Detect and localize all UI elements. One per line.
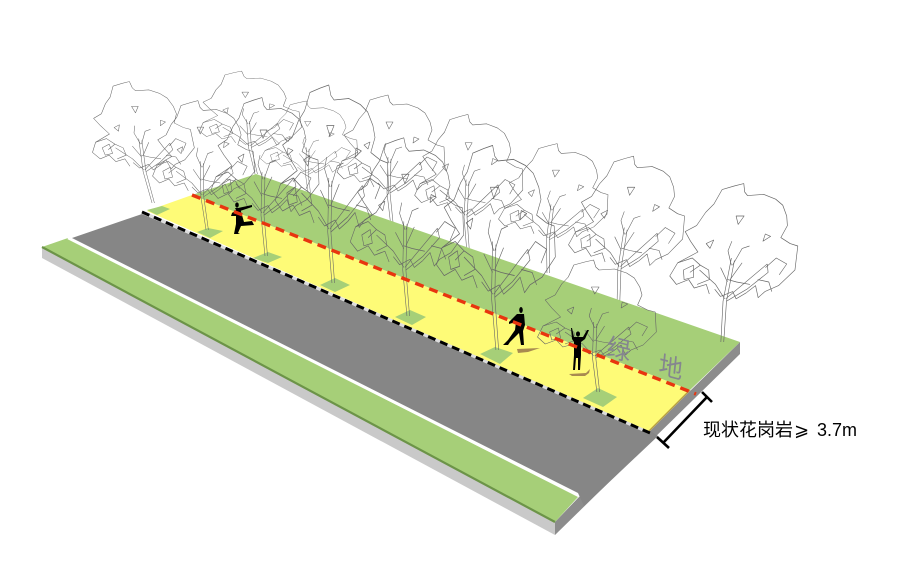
asphalt road xyxy=(72,214,658,506)
label: green belt xyxy=(605,333,684,385)
person: kicking runner xyxy=(231,202,254,234)
person: arms raised xyxy=(571,328,589,370)
back row trees xyxy=(81,71,693,308)
label: green belt: 地 xyxy=(657,351,684,385)
dimension label: 现状花岗岩 xyxy=(703,420,793,440)
person: walking figure xyxy=(503,307,525,345)
front planting strip xyxy=(42,238,578,522)
white kerb line xyxy=(68,238,578,495)
black and white kerb dashes xyxy=(142,212,650,433)
road slab side faces xyxy=(42,247,740,535)
tree pits xyxy=(147,206,617,407)
dimension bracket xyxy=(657,392,712,448)
dimension label: 3.7m xyxy=(817,420,857,440)
arms raised figure shadow xyxy=(569,369,590,376)
back tree over belt and front row trees xyxy=(149,85,809,392)
label: green belt: 绿 xyxy=(605,333,632,367)
walking figure shadow xyxy=(517,348,540,353)
green belt xyxy=(192,174,740,390)
red boundary dashes xyxy=(192,195,696,394)
yellow granite pavement xyxy=(147,195,690,432)
dimension label: ⩾ xyxy=(794,420,809,441)
